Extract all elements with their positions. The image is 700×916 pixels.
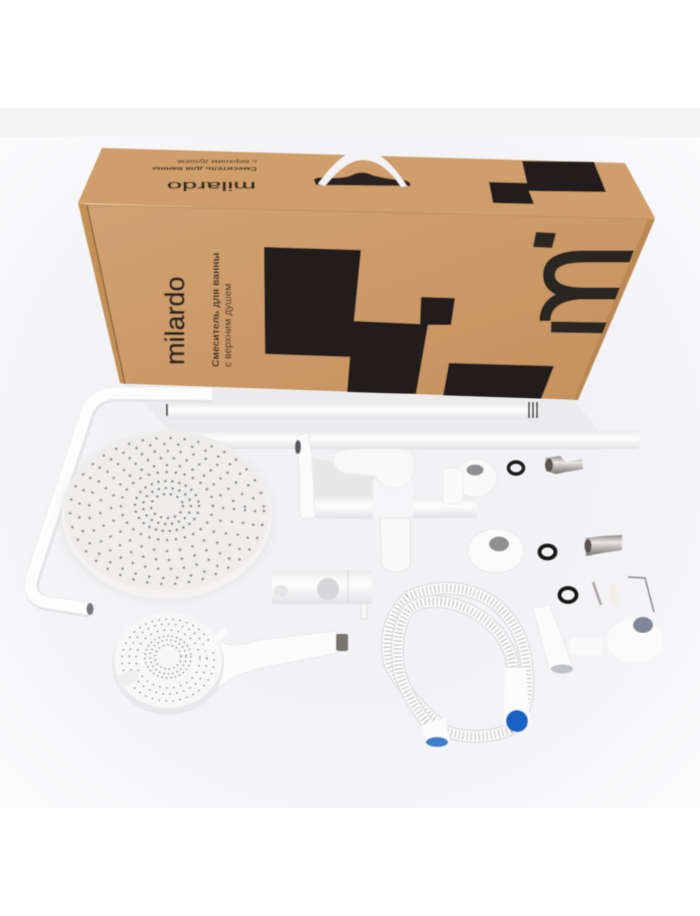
mixer shaded backing [298, 432, 380, 520]
product photo [0, 108, 700, 808]
product subtitle side: с верхним душем [223, 284, 234, 367]
cardboard box [78, 148, 655, 400]
tee connector [533, 605, 603, 674]
spout [380, 518, 410, 572]
telescopic rod lower [170, 431, 640, 449]
box top flap [78, 148, 655, 222]
lever handle [333, 449, 414, 488]
product subtitle flap: с верхним душем [178, 159, 257, 165]
box flap crease [87, 205, 648, 219]
spray nozzles [70, 438, 264, 584]
diverter column [297, 432, 315, 519]
screw [593, 582, 601, 605]
bath mixer [295, 432, 477, 572]
handle strap [318, 150, 407, 187]
gasket one [508, 462, 524, 474]
brand name side: milardo [160, 276, 190, 365]
flap black graphic [489, 161, 606, 204]
logo dot [533, 232, 556, 248]
shower parts [31, 384, 663, 748]
product name side: Смеситель для ванны [211, 252, 222, 367]
box black square graphic [264, 247, 455, 394]
handle slot [314, 172, 410, 186]
escutcheon one [453, 459, 497, 497]
mixer body [373, 478, 413, 520]
wall bracket [607, 617, 663, 663]
hand shower lever [202, 628, 229, 652]
right elbow [443, 468, 463, 504]
gasket two [540, 546, 556, 558]
hose strand two [397, 602, 517, 735]
hand shower head [112, 613, 224, 715]
hand shower nozzles [122, 619, 214, 701]
connector two [584, 535, 622, 556]
box left edge [78, 203, 125, 384]
large m logo [545, 256, 640, 328]
gasket three [560, 588, 576, 602]
hand shower thread [336, 634, 348, 651]
diverter knob [295, 440, 301, 454]
wall plug [611, 584, 618, 606]
shadow under pipes [125, 384, 600, 450]
brand name flap: milardo [167, 179, 256, 192]
hose strand one [387, 588, 528, 736]
rod black rings [529, 402, 537, 418]
box right edge [573, 219, 655, 400]
box black rectangle graphic [443, 363, 554, 399]
hand shower [112, 612, 348, 715]
telescopic rod upper [166, 402, 539, 419]
mixer arms [315, 497, 477, 518]
box front face [87, 204, 648, 400]
box left seam [87, 205, 125, 384]
connector one [545, 456, 583, 474]
shower hose [387, 588, 528, 736]
rain shower head [62, 431, 272, 599]
hose end lower [422, 718, 450, 748]
curved overhead pipe [31, 393, 212, 615]
product name flap: Смеситель для ванны [152, 166, 257, 172]
pipe end [86, 603, 94, 615]
escutcheon two [468, 529, 524, 573]
hose end upper [504, 668, 530, 732]
slider bracket [272, 570, 372, 619]
hand shower handle [214, 631, 338, 692]
hex key [628, 577, 654, 612]
hand shower button [116, 668, 138, 688]
